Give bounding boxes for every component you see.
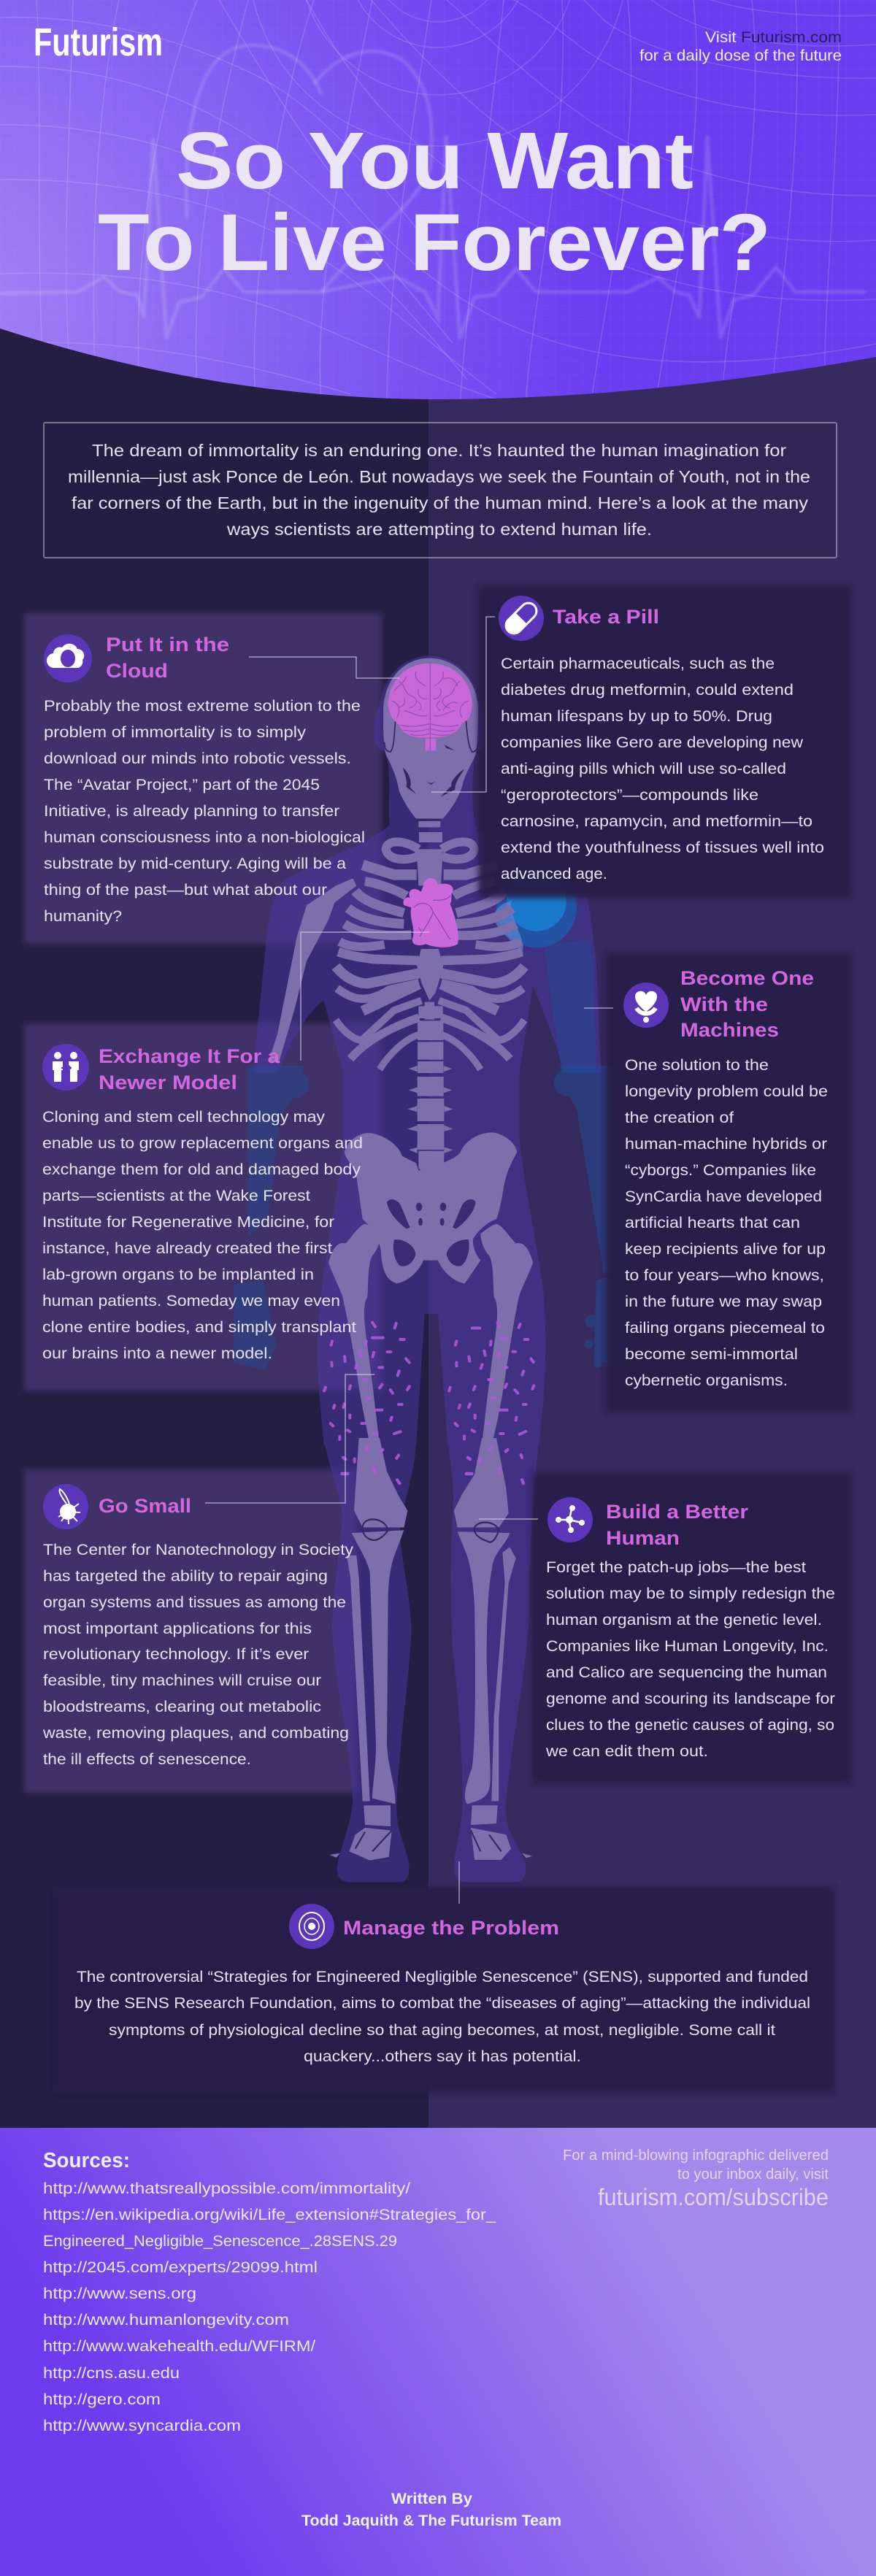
heading [606, 1501, 749, 1549]
header banner [0, 0, 876, 409]
title: To Live Forever? [98, 198, 771, 288]
heading: Manage the Problem [343, 1917, 559, 1939]
body text: the ill effects of senescence. [43, 1751, 251, 1768]
subscribe callout: to your inbox daily, visit [677, 2166, 829, 2183]
intro box: ways scientists are attempting to extend human life. [226, 520, 652, 539]
brain [388, 664, 472, 750]
heading: Become One [680, 967, 814, 989]
intro box: The dream of immortality is an enduring one. It’s haunted the human imagination for [92, 441, 786, 460]
body text: SynCardia have developed [625, 1188, 822, 1205]
subscribe callout [563, 2148, 829, 2210]
cybernetic arm [234, 867, 628, 1370]
body text: Forget the patch-up jobs—the best [546, 1559, 806, 1576]
body text: companies like Gero are developing new [501, 734, 804, 751]
body text: Cloning and stem cell technology may [42, 1109, 326, 1126]
sources heading: Sources: [43, 2149, 130, 2172]
body text: thing of the past—but what about our [44, 882, 327, 899]
spine and pelvis [328, 1066, 533, 1445]
logo: Futurism: Futurism [34, 20, 163, 64]
body text: Certain pharmaceuticals, such as the [501, 655, 775, 672]
body text: Companies like Human Longevity, Inc. [546, 1638, 829, 1655]
body text: The Center for Nanotechnology in Society [43, 1542, 354, 1558]
heart [403, 878, 458, 947]
body text: enable us to grow replacement organs and [42, 1135, 363, 1152]
sources list: http://cns.asu.edu [43, 2365, 180, 2382]
body text: by the SENS Research Foundation, aims to combat the “diseases of aging”—attacking the individual [74, 1995, 810, 2012]
body text: has targeted the ability to repair aging [43, 1568, 328, 1585]
body text: human-machine hybrids or [625, 1136, 827, 1153]
body text: cybernetic organisms. [625, 1372, 788, 1389]
body text: humanity? [44, 908, 122, 925]
body text: and Calico are sequencing the human [546, 1664, 827, 1681]
body text [625, 1057, 828, 1389]
body text: organ systems and tissues as among the [43, 1594, 346, 1611]
body text [545, 1559, 835, 1760]
icon: two people [42, 1044, 89, 1091]
body text: anti-aging pills which will use so-called [501, 761, 786, 777]
subscribe callout: For a mind-blowing infographic delivered [563, 2148, 829, 2164]
body text: human patients. Someday we may even [42, 1293, 340, 1310]
body text: Initiative, is already planning to transfer [44, 803, 339, 820]
visit note: for a daily dose of the future [639, 47, 842, 64]
body text [501, 655, 824, 883]
body text: instance, have already created the first [42, 1240, 332, 1257]
heading: Exchange It For a [99, 1045, 280, 1067]
sources list: http://www.sens.org [43, 2285, 196, 2302]
body text: human consciousness into a non-biological [44, 829, 365, 846]
intro box [44, 423, 837, 558]
credits: Written By [391, 2491, 472, 2507]
body text: to four years—who knows, [625, 1267, 824, 1284]
panel: go small [42, 1484, 354, 1768]
body text: lab-grown organs to be implanted in [42, 1266, 314, 1283]
body text: bloodstreams, clearing out metabolic [43, 1699, 321, 1715]
body text [74, 1969, 810, 2065]
icon: cell [289, 1904, 334, 1949]
sources list: https://en.wikipedia.org/wiki/Life_extension#Strategies_for_ [43, 2207, 496, 2223]
panel: manage the problem [74, 1904, 810, 2065]
heading: With the [680, 993, 768, 1015]
sources list [43, 2180, 496, 2434]
sources list: http://www.humanlongevity.com [43, 2312, 289, 2329]
body text: artificial hearts that can [625, 1215, 800, 1231]
body text [44, 698, 365, 925]
visit note [639, 29, 842, 64]
credits [301, 2491, 561, 2529]
body text: One solution to the [625, 1057, 769, 1074]
credits: Todd Jaquith & The Futurism Team [301, 2512, 561, 2529]
heading [106, 634, 229, 682]
body text: exchange them for old and damaged body [42, 1161, 361, 1178]
body text: “cyborgs.” Companies like [625, 1162, 816, 1179]
nanobots [324, 1323, 534, 1483]
footer [0, 2128, 876, 2576]
heading: Newer Model [99, 1072, 237, 1093]
heading [99, 1045, 280, 1093]
body text: symptoms of physiological decline so that aging becomes, at most, negligible. Some call it [109, 2022, 775, 2039]
title [98, 116, 771, 288]
title: So You Want [176, 116, 694, 206]
body text: keep recipients alive for up [625, 1241, 826, 1258]
panel: build a better human [545, 1497, 835, 1760]
rib cage [269, 842, 524, 1073]
body text: our brains into a newer model. [42, 1345, 272, 1362]
body text: revolutionary technology. If it’s ever [43, 1646, 309, 1663]
right panel backgrounds [55, 585, 851, 2093]
body text: The controversial “Strategies for Engineered Negligible Senescence” (SENS), supported and funded [77, 1969, 808, 1985]
body text: the creation of [625, 1110, 734, 1126]
icon: pill [499, 596, 544, 641]
heading: Machines [680, 1019, 779, 1041]
icon: molecule [548, 1497, 593, 1542]
body text: problem of immortality is to simply [44, 724, 307, 741]
skull [383, 658, 478, 842]
body text: waste, removing plaques, and combating [42, 1725, 349, 1742]
body text: Probably the most extreme solution to the [44, 698, 361, 715]
skeleton [269, 658, 533, 1861]
body text: The “Avatar Project,” part of the 2045 [44, 777, 320, 793]
heading: Cloud [106, 660, 168, 682]
heading: Go Small [99, 1495, 191, 1517]
body text: failing organs piecemeal to [625, 1320, 825, 1337]
body text: extend the youthfulness of tissues well into [501, 839, 824, 856]
panel: exchange it for a newer model [42, 1044, 363, 1362]
heading [680, 967, 814, 1041]
body silhouette [253, 655, 601, 1882]
panel: take a pill [499, 596, 824, 883]
left panel backgrounds [24, 613, 382, 1793]
body text [42, 1542, 354, 1768]
body text: solution may be to simply redesign the [546, 1585, 835, 1602]
lower legs [330, 1438, 532, 1861]
sources list: http://www.syncardia.com [43, 2418, 241, 2434]
body text: Institute for Regenerative Medicine, for [42, 1214, 334, 1231]
icon: heart and gear [623, 983, 669, 1028]
intro box: millennia—just ask Ponce de León. But nowadays we seek the Fountain of Youth, not in the [68, 467, 810, 486]
visit note: Visit Futurism.com [705, 29, 842, 46]
connector lines [205, 617, 613, 1904]
body text: “geroprotectors”—compounds like [501, 787, 758, 804]
body text: diabetes drug metformin, could extend [501, 682, 794, 699]
heading: Build a Better [606, 1501, 749, 1523]
body text: clone entire bodies, and simply transplant [42, 1319, 356, 1336]
sources list: http://www.wakehealth.edu/WFIRM/ [43, 2338, 315, 2355]
body text: advanced age. [501, 866, 607, 883]
body text: most important applications for this [43, 1620, 312, 1637]
body text: longevity problem could be [625, 1083, 828, 1100]
body text: parts—scientists at the Wake Forest [42, 1188, 310, 1204]
body text: carnosine, rapamycin, and metformin—to [501, 813, 812, 830]
panel: put it in the cloud [44, 634, 365, 925]
heading: Put It in the [106, 634, 229, 655]
body text: clues to the genetic causes of aging, so [546, 1717, 834, 1734]
body text: feasible, tiny machines will cruise our [43, 1672, 321, 1689]
intro box: far corners of the Earth, but in the ingenuity of the human mind. Here’s a look at the many [72, 493, 809, 512]
sources list: Engineered_Negligible_Senescence_.28SENS.29 [43, 2233, 397, 2250]
body text: genome and scouring its landscape for [546, 1691, 835, 1707]
body text: download our minds into robotic vessels. [44, 750, 351, 767]
body text: we can edit them out. [545, 1743, 708, 1760]
body text: human organism at the genetic level. [546, 1612, 822, 1629]
icon: brain in cloud [44, 634, 92, 683]
sources list: http://2045.com/experts/29099.html [43, 2259, 318, 2276]
body text: quackery...others say it has potential. [304, 2048, 581, 2065]
heading: Take a Pill [553, 606, 659, 628]
body text: in the future we may swap [625, 1293, 822, 1310]
body text: substrate by mid-century. Aging will be a [44, 856, 346, 872]
panel: become one with the machines [623, 967, 828, 1389]
icon: nanobot [43, 1484, 88, 1529]
body text: human lifespans by up to 50%. Drug [501, 708, 772, 725]
body text: become semi-immortal [625, 1346, 798, 1363]
sources list: http://www.thatsreallypossible.com/immortality/ [43, 2180, 410, 2197]
subscribe callout: futurism.com/subscribe [598, 2184, 829, 2210]
sources list: http://gero.com [43, 2391, 161, 2408]
body text [42, 1109, 363, 1362]
heading: Human [606, 1527, 680, 1549]
